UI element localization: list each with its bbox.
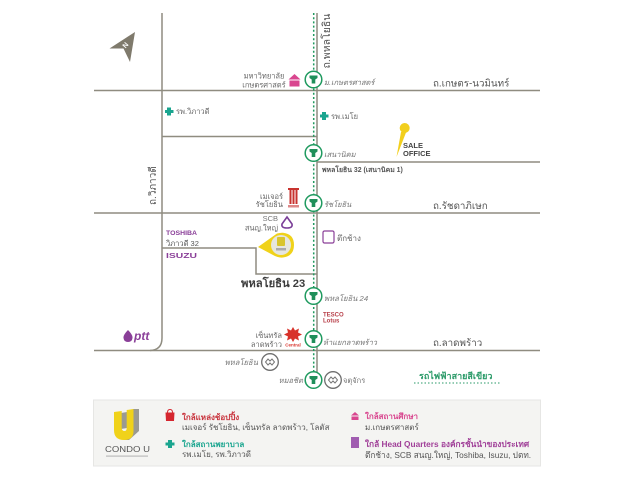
MRT: Chatuchak	[325, 372, 365, 388]
landmark: Tesco Lotus: Lotus	[323, 318, 340, 324]
icon: north arrow	[110, 32, 135, 62]
text: near head quarters: ใกล้ Head Quarters องค์กรชั้นนำของประเทศ	[365, 437, 530, 449]
station: Mo Chit	[279, 372, 322, 388]
road network	[94, 13, 540, 372]
street label: Phahonyothin 32: พหลโยธิน 32 (เสนานิคม 1)	[321, 165, 403, 174]
landmark: Kasetsart University: เกษตรศาสตร์	[242, 80, 286, 90]
station: Kasetsart	[305, 71, 376, 88]
landmark: SCB	[245, 214, 292, 232]
landmark: Central Lat Phrao	[251, 327, 302, 349]
landmark: Central Lat Phrao: ลาดพร้าว	[251, 340, 282, 349]
road label: Vibhavadi: ถ.วิภาวดี	[147, 166, 159, 205]
station: Mo Chit: หมอชิต	[279, 376, 304, 385]
icon: headquarters	[351, 437, 359, 448]
landmark: PTT: ptt	[133, 329, 150, 343]
landmark: Kasetsart University: มหาวิทยาลัย	[244, 72, 284, 80]
text: near hospitals	[182, 439, 251, 459]
text: near education: ใกล้สถานศึกษา	[365, 411, 418, 421]
green BTS line	[313, 13, 315, 384]
project pin: Condo U	[258, 233, 294, 258]
landmark: Central Lat Phrao: Central	[285, 342, 301, 348]
landmark: Major Ratchayothin: เมเจอร์	[260, 192, 283, 201]
MRT: Chatuchak: จตุจักร	[343, 376, 365, 385]
legend: BTS green line	[414, 370, 500, 383]
MRT: Phahonyothin	[225, 354, 278, 370]
road label: Lat Phrao: ถ.ลาดพร้าว	[433, 338, 482, 349]
text: near hospitals: ใกล้สถานพยาบาล	[182, 439, 244, 449]
road label: Ratchadaphisek: ถ.รัชดาภิเษก	[433, 201, 488, 212]
landmark: Chang building: ตึกช้าง	[337, 234, 361, 243]
logo: Condo U	[105, 409, 150, 457]
landmark: Kasetsart University	[242, 72, 300, 90]
legend: BTS green line: รถไฟฟ้าสายสีเขียว	[419, 370, 492, 381]
text: near education	[365, 411, 419, 432]
MRT: Phahonyothin: พหลโยธิน	[225, 358, 259, 367]
panel: highlights	[94, 400, 540, 466]
text: near head quarters: ตึกช้าง, SCB สนญ.ใหญ่, Toshiba, Isuzu, ปตท.	[365, 450, 531, 460]
station: Ratchayothin: รัชโยธิน	[324, 200, 352, 209]
text: near hospitals: รพ.เมโย, รพ.วิภาวดี	[182, 449, 251, 459]
landmark: Tesco Lotus: TESCO	[323, 312, 344, 318]
hospital: Vibhavadi: รพ.วิภาวดี	[176, 107, 210, 116]
landmark: Tesco Lotus	[323, 312, 344, 324]
station: Ratchayothin	[305, 195, 352, 211]
landmark: Isuzu: ISUZU	[166, 251, 197, 260]
station: Senanikom	[305, 145, 357, 161]
text: near shopping: ใกล้แหล่งช้อปปิ้ง	[182, 411, 239, 422]
icon: hospital	[166, 440, 174, 448]
landmark: SCB: SCB	[263, 214, 278, 223]
station: Ha Yaek Lat Phrao	[305, 331, 378, 347]
station: Kasetsart: ม.เกษตรศาสตร์	[324, 78, 376, 87]
logo: Condo U: CONDO U	[105, 444, 150, 454]
icon: shopping	[166, 409, 174, 421]
sale office pin	[396, 123, 430, 158]
landmark: Central Lat Phrao: เซ็นทรัล	[256, 330, 282, 340]
text: near shopping	[182, 411, 330, 432]
project label: Phahonyothin 23: พหลโยธิน 23	[241, 276, 305, 290]
landmark: Major Ratchayothin: รัชโยธิน	[256, 200, 283, 209]
station: Ha Yaek Lat Phrao: ห้าแยกลาดพร้าว	[323, 338, 378, 347]
icon: education	[351, 412, 359, 420]
road label: Kaset-Nawamin: ถ.เกษตร-นวมินทร์	[433, 78, 509, 90]
station: Phahonyothin 24: พหลโยธิน 24	[324, 294, 368, 303]
text: near education: ม.เกษตรศาสตร์	[365, 422, 419, 432]
landmark: PTT	[123, 329, 150, 343]
landmark: SCB: สนญ.ใหญ่	[245, 224, 278, 232]
station: Phahonyothin 24	[305, 288, 368, 304]
station: Senanikom: เสนานิคม	[324, 150, 357, 159]
street label: Vibhavadi 32: วิภาวดี 32	[165, 239, 199, 248]
text: near head quarters	[365, 437, 531, 460]
road label: Phahonyothin: ถ.พหลโยธิน	[320, 14, 333, 68]
icon: north arrow: N	[122, 41, 130, 50]
text: near shopping: เมเจอร์ รัชโยธิน, เซ็นทรัล ลาดพร้าว, โลตัส	[182, 422, 330, 432]
hospital: Mayo: รพ.เมโย	[331, 112, 358, 121]
landmark: Major Ratchayothin	[256, 188, 299, 209]
landmark: Toshiba: TOSHIBA	[166, 231, 198, 237]
sale office pin: OFFICE	[403, 149, 430, 158]
sale office pin: SALE	[403, 141, 423, 150]
landmark: Chang building	[323, 231, 361, 243]
